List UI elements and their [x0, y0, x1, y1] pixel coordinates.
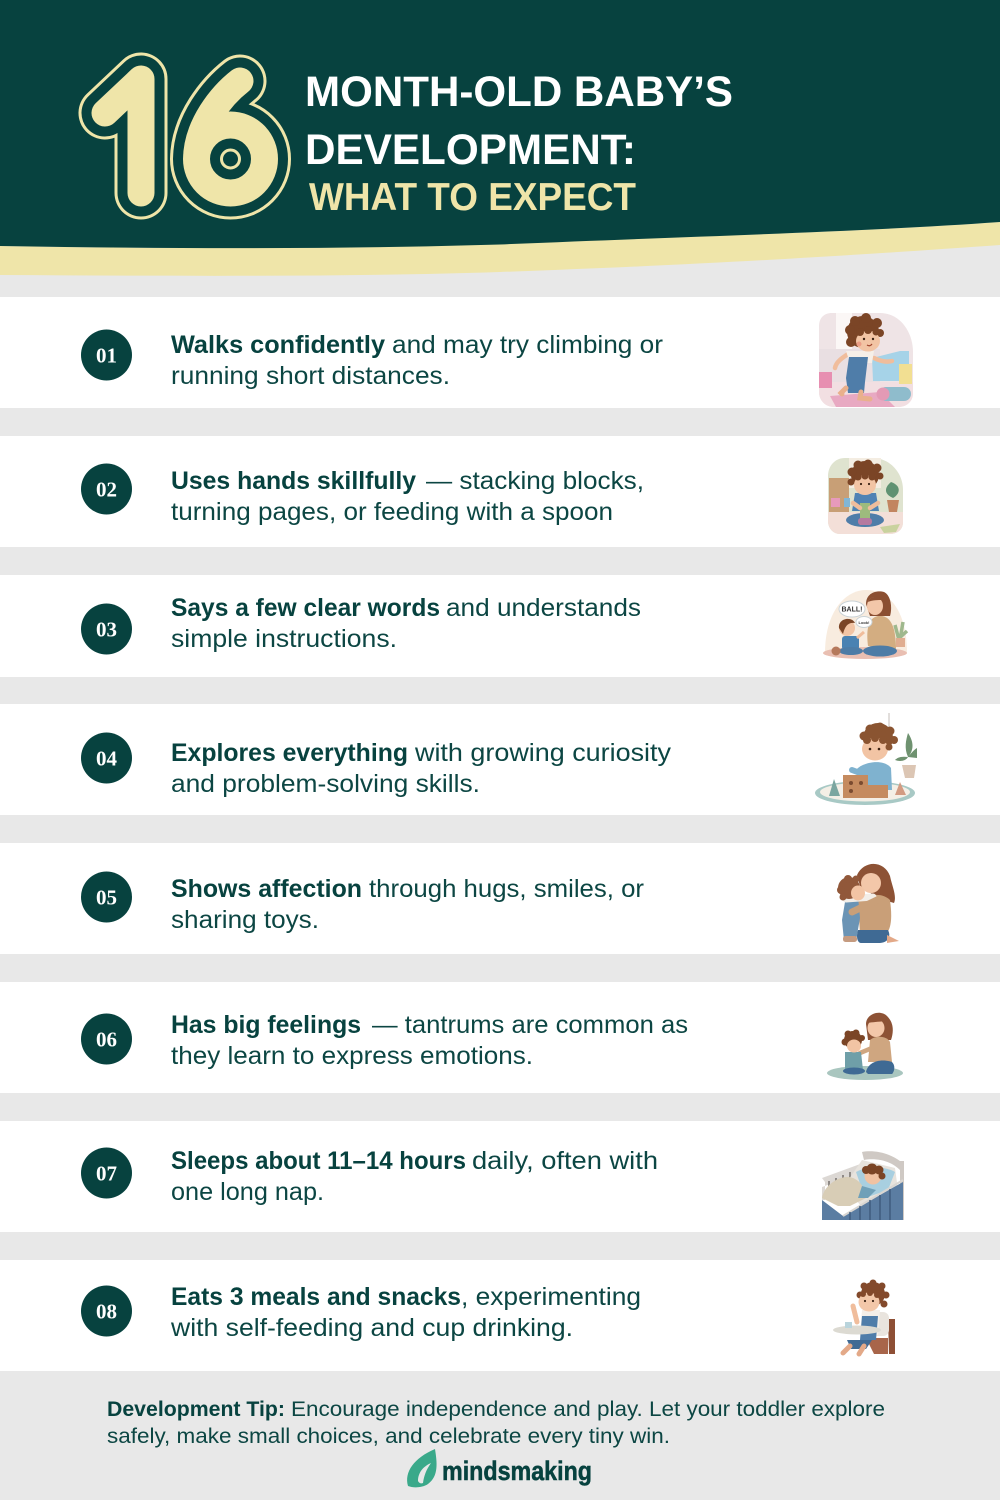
badge 06 [81, 1014, 132, 1064]
text 07: Sleeps about 11–14 hours [171, 1147, 466, 1175]
text 01: and may try climbing or [392, 331, 663, 359]
badge 02: 02 [96, 478, 117, 502]
illustration: toddler talking with mom: Look! [859, 620, 869, 625]
text 07 [171, 1147, 658, 1206]
title: MONTH-OLD BABY’S [305, 68, 733, 116]
row 02 [0, 436, 1000, 547]
row 03 [0, 575, 1000, 677]
text 03: simple instructions. [171, 625, 397, 653]
text 04: with growing curiosity [414, 739, 672, 767]
illustration: toddler stacking blocks [828, 458, 903, 534]
text 06 [171, 1011, 688, 1070]
text 04: and problem-solving skills. [171, 770, 480, 798]
illustration: mom comforting toddler [827, 1013, 903, 1080]
text 01 [171, 331, 663, 390]
text 08 [170, 1283, 641, 1342]
illustration: toddler sleeping in crib [822, 1151, 904, 1220]
badge 03 [81, 604, 132, 654]
row 06 [0, 982, 1000, 1093]
text 05 [171, 875, 644, 934]
row 07 [0, 1121, 1000, 1232]
text 02: Uses hands skillfully [171, 467, 416, 495]
text 03 [171, 594, 641, 653]
text 06: Has big feelings [171, 1011, 361, 1039]
logo: mindsmaking [407, 1449, 592, 1487]
text 01: Walks confidently [171, 331, 385, 359]
development tip [107, 1397, 885, 1448]
badge 07: 07 [96, 1162, 117, 1186]
text 02: turning pages, or feeding with a spoon [171, 498, 613, 526]
development tip: safely, make small choices, and celebrate every tiny win. [107, 1424, 670, 1448]
text 03: and understands [446, 594, 641, 622]
text 07: daily, often with [472, 1147, 658, 1175]
illustration: toddler talking with mom [823, 590, 907, 659]
badge 01 [81, 330, 132, 380]
badge 04: 04 [96, 746, 118, 770]
big number 16 [105, 79, 264, 193]
text 02 [171, 467, 644, 526]
header banner [0, 0, 1000, 276]
illustration: toddler exploring with blocks [815, 713, 917, 805]
icon: leaf [407, 1449, 437, 1487]
text 04: Explores everything [171, 739, 408, 767]
badge 08: 08 [96, 1300, 117, 1324]
text 08: with self-feeding and cup drinking. [170, 1314, 573, 1342]
row 08 [0, 1260, 1000, 1371]
badge 08 [81, 1286, 132, 1336]
title: DEVELOPMENT: [305, 126, 636, 174]
illustration: toddler hugging mom [837, 864, 899, 943]
badge 06: 06 [96, 1028, 117, 1052]
badge 02 [81, 464, 132, 514]
text 05: through hugs, smiles, or [369, 875, 644, 903]
text 05: Shows affection [171, 875, 362, 903]
illustration: toddler talking with mom: BALL! [842, 606, 862, 614]
text 07: one long nap. [171, 1178, 324, 1206]
development tip: Development Tip: [107, 1397, 285, 1421]
row 05 [0, 843, 1000, 954]
title [305, 68, 733, 219]
title: WHAT TO EXPECT [309, 176, 636, 219]
row 04 [0, 704, 1000, 815]
text 05: sharing toys. [171, 906, 319, 934]
text 08: Eats 3 meals and snacks [171, 1283, 461, 1311]
illustration: toddler walking [819, 313, 913, 407]
text 02: — stacking blocks, [426, 467, 644, 495]
badge 04 [81, 732, 132, 784]
badge 05 [81, 872, 132, 922]
row 01 [0, 297, 1000, 408]
text 08: , experimenting [461, 1283, 641, 1311]
badge 01: 01 [96, 344, 117, 368]
badge 03: 03 [96, 618, 117, 642]
development tip: Encourage independence and play. Let your toddler explore [291, 1397, 885, 1421]
illustration: toddler self-feeding in high chair [833, 1280, 895, 1354]
text 01: running short distances. [171, 362, 450, 390]
text 06: — tantrums are common as [372, 1011, 688, 1039]
text 03: Says a few clear words [171, 594, 440, 622]
badge 05: 05 [96, 886, 117, 910]
badge 07 [81, 1148, 132, 1198]
text 06: they learn to express emotions. [171, 1042, 533, 1070]
logo: mindsmaking: mindsmaking [442, 1456, 592, 1486]
text 04 [171, 739, 672, 798]
